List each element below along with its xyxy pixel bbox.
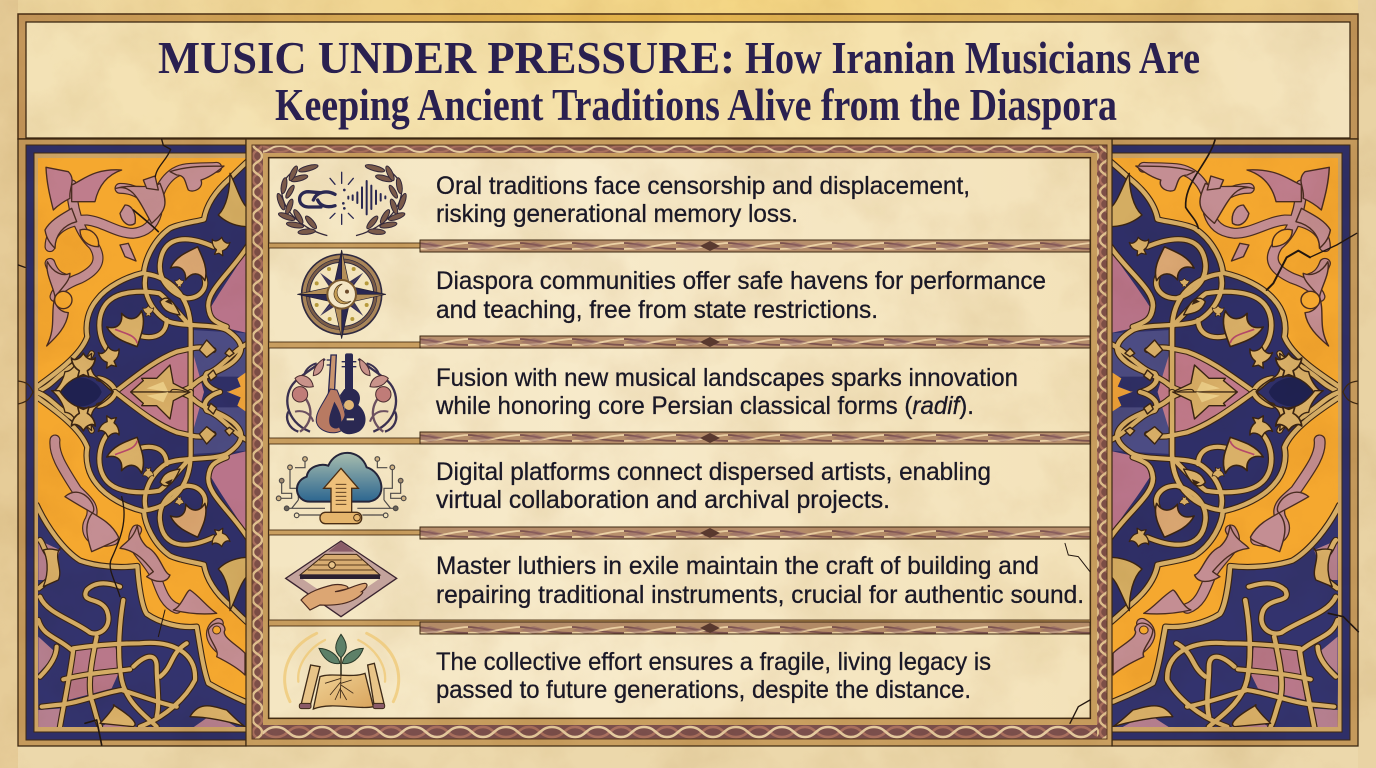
row 4: digital platforms <box>276 453 991 524</box>
title <box>158 32 1200 130</box>
text: oral traditions <box>436 172 970 228</box>
row 6: collective effort <box>285 633 991 709</box>
text: fusion <box>435 364 1018 420</box>
icon: cloud upload with circuit lines and scroll <box>276 453 406 524</box>
icon: seedling rooted on a scroll with glow <box>285 633 399 709</box>
title: MUSIC UNDER PRESSURE: <box>158 32 735 83</box>
row 2: diaspora communities <box>297 250 1046 339</box>
icon: compass rose with crescent <box>297 250 386 339</box>
panel: central framed list <box>246 139 1112 746</box>
panel: left ornamental illumination <box>18 139 248 746</box>
text: master luthiers: Master luthiers in exile maintain the craft of building and <box>436 552 1039 580</box>
icon: qanun on diamond with open hand <box>286 541 397 617</box>
outer frame and title panel background <box>18 14 1358 139</box>
text: collective effort: passed to future generations, despite the distance. <box>436 676 971 704</box>
text: diaspora communities <box>436 267 1046 324</box>
row backgrounds and dividers <box>269 158 1090 718</box>
text: collective effort: The collective effort ensures a fragile, living legacy is <box>436 648 991 676</box>
cracks across the center panel <box>1065 543 1090 723</box>
text: diaspora communities: and teaching, free from state restrictions. <box>436 296 878 324</box>
icon: tar and guitar with floral sprays <box>287 353 396 434</box>
text: master luthiers <box>436 552 1084 609</box>
panel: right ornamental illumination <box>1109 139 1358 746</box>
title: How Iranian Musicians Are <box>745 32 1200 83</box>
title: Keeping Ancient Traditions Alive from the Diaspora <box>275 79 1117 130</box>
text: digital platforms: virtual collaboration and archival projects. <box>436 486 890 514</box>
text: oral traditions: Oral traditions face censorship and displacement, <box>436 172 970 200</box>
text: digital platforms: Digital platforms connect dispersed artists, enabling <box>436 458 991 486</box>
text: master luthiers: repairing traditional instruments, crucial for authentic sound. <box>436 581 1084 609</box>
text: diaspora communities: Diaspora communities offer safe havens for performance <box>436 267 1046 295</box>
text: oral traditions: risking generational memory loss. <box>436 200 798 228</box>
row 5: master luthiers <box>286 541 1084 617</box>
text: fusion: Fusion with new musical landscapes sparks innovation <box>436 364 1018 392</box>
text: fusion: while honoring core Persian classical forms (radif). <box>435 392 974 420</box>
text: digital platforms <box>436 458 991 514</box>
row 1: oral traditions <box>276 163 970 236</box>
row 3: fusion <box>287 353 1018 434</box>
icon: laurel wreath with broken chain and sound wave <box>276 163 408 236</box>
text: collective effort <box>436 648 991 704</box>
